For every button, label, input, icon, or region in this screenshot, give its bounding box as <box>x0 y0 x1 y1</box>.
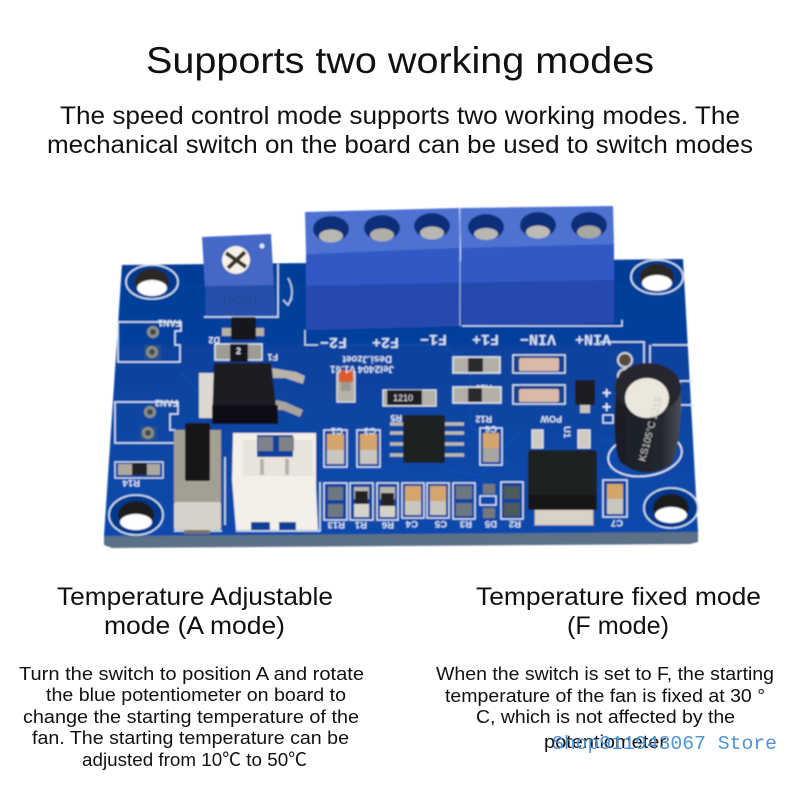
fan 2 header: FAN2 <box>155 398 178 408</box>
component labels: C7 <box>611 517 623 528</box>
pcb surface <box>104 259 698 536</box>
component labels: R14 <box>122 477 140 488</box>
fan 1 header: FAN1 <box>158 318 181 328</box>
fan 1 header <box>118 318 181 362</box>
component labels: C4 <box>405 518 418 529</box>
left mode description: fan. The starting temperature can be <box>32 727 349 748</box>
electrolytic capacitor: KS105°C 2216 <box>637 395 665 463</box>
fuse F1: 2 <box>236 346 241 356</box>
right mode description <box>436 663 774 752</box>
terminal labels: VIN+ <box>575 330 611 347</box>
left mode description <box>19 663 364 770</box>
resistor r14 <box>115 462 163 478</box>
potentiometer: 103201 <box>222 293 258 305</box>
terminal labels: VIN− <box>520 330 556 347</box>
right side pins and marks <box>575 342 694 423</box>
smd row: r10 and pwm: R10 <box>475 383 492 393</box>
component labels: C5 <box>434 518 447 529</box>
board print: JeI2404 v1.61 <box>330 363 394 374</box>
left mode description: Turn the switch to position A and rotate <box>19 663 364 684</box>
component labels: R3 <box>460 518 472 529</box>
potentiometer <box>202 234 292 317</box>
right mode heading: (F mode) <box>567 612 669 640</box>
smd row: r10 and pwm <box>453 355 565 393</box>
ic chip <box>390 415 464 463</box>
regulator u1 <box>528 430 597 525</box>
board edge <box>104 531 698 548</box>
component labels: C1 <box>330 425 343 436</box>
terminal block left <box>305 208 461 345</box>
terminal block right <box>460 206 622 326</box>
diode D2 <box>208 317 264 345</box>
right mode heading: Temperature fixed mode <box>476 583 761 611</box>
left mode heading: mode (A mode) <box>104 612 285 640</box>
right mode description: temperature of the fan is fixed at 30 ° <box>445 685 765 706</box>
white connector <box>232 433 320 531</box>
component labels: R6 <box>382 519 394 530</box>
component labels: R13 <box>328 519 345 530</box>
right mode description: potentiometer <box>544 731 666 752</box>
mounting holes <box>109 260 698 535</box>
terminal labels: F2− <box>320 333 347 350</box>
left mode description: adjusted from 10℃ to 50℃ <box>82 749 307 770</box>
component labels <box>122 423 623 530</box>
resistors bottom row <box>324 482 523 520</box>
component labels: C6 <box>485 423 497 434</box>
left mode description: the blue potentiometer on board to <box>46 684 346 705</box>
resistor 1210: R5 <box>390 413 402 423</box>
resistor 1210: 1210 <box>393 393 413 403</box>
copper traces <box>180 345 640 475</box>
component labels: R2 <box>509 518 521 529</box>
terminal labels: F1− <box>420 330 447 347</box>
left mode heading: Temperature Adjustable <box>57 583 333 611</box>
fan 2 header <box>115 398 178 443</box>
fuse F1 <box>215 344 278 362</box>
smd row: r12 and pow: POW <box>540 414 562 424</box>
slide switch <box>174 423 225 534</box>
component labels: D5 <box>484 518 497 529</box>
diode D2: D2 <box>208 335 220 345</box>
circuit board photo <box>104 206 698 548</box>
board print: Desi.Jzoet <box>342 353 392 364</box>
diode D4 <box>337 370 355 402</box>
store watermark: Shop911943067 Store <box>552 733 777 755</box>
right mode heading <box>476 583 761 640</box>
right mode description: When the switch is set to F, the starting <box>436 663 774 684</box>
component labels: C3 <box>364 425 376 436</box>
electrolytic capacitor <box>605 363 685 481</box>
intro text <box>47 102 753 159</box>
board print <box>330 353 394 374</box>
right mode description: C, which is not affected by the <box>476 706 735 727</box>
capacitors <box>324 428 627 518</box>
left mode description: change the starting temperature of the <box>23 706 359 727</box>
terminal labels <box>320 330 611 350</box>
left mosfet <box>199 363 305 424</box>
smd row: r10 and pwm: PWM <box>540 383 562 393</box>
intro text: The speed control mode supports two working modes. The <box>60 102 740 130</box>
terminal labels: F1+ <box>472 330 499 347</box>
right side pins and marks: + <box>602 385 611 402</box>
intro text: mechanical switch on the board can be used to switch modes <box>47 131 753 159</box>
right side pins and marks: + <box>602 399 611 416</box>
component labels: R1 <box>354 519 367 530</box>
left mode heading <box>57 583 333 640</box>
title: Supports two working modes <box>146 40 654 81</box>
component labels: U1 <box>561 426 572 439</box>
terminal labels: F2+ <box>372 333 399 350</box>
resistor 1210 <box>383 390 436 423</box>
smd row: r12 and pow: R12 <box>475 414 492 424</box>
smd row: r12 and pow <box>453 385 565 424</box>
fuse F1: F1 <box>267 352 278 362</box>
